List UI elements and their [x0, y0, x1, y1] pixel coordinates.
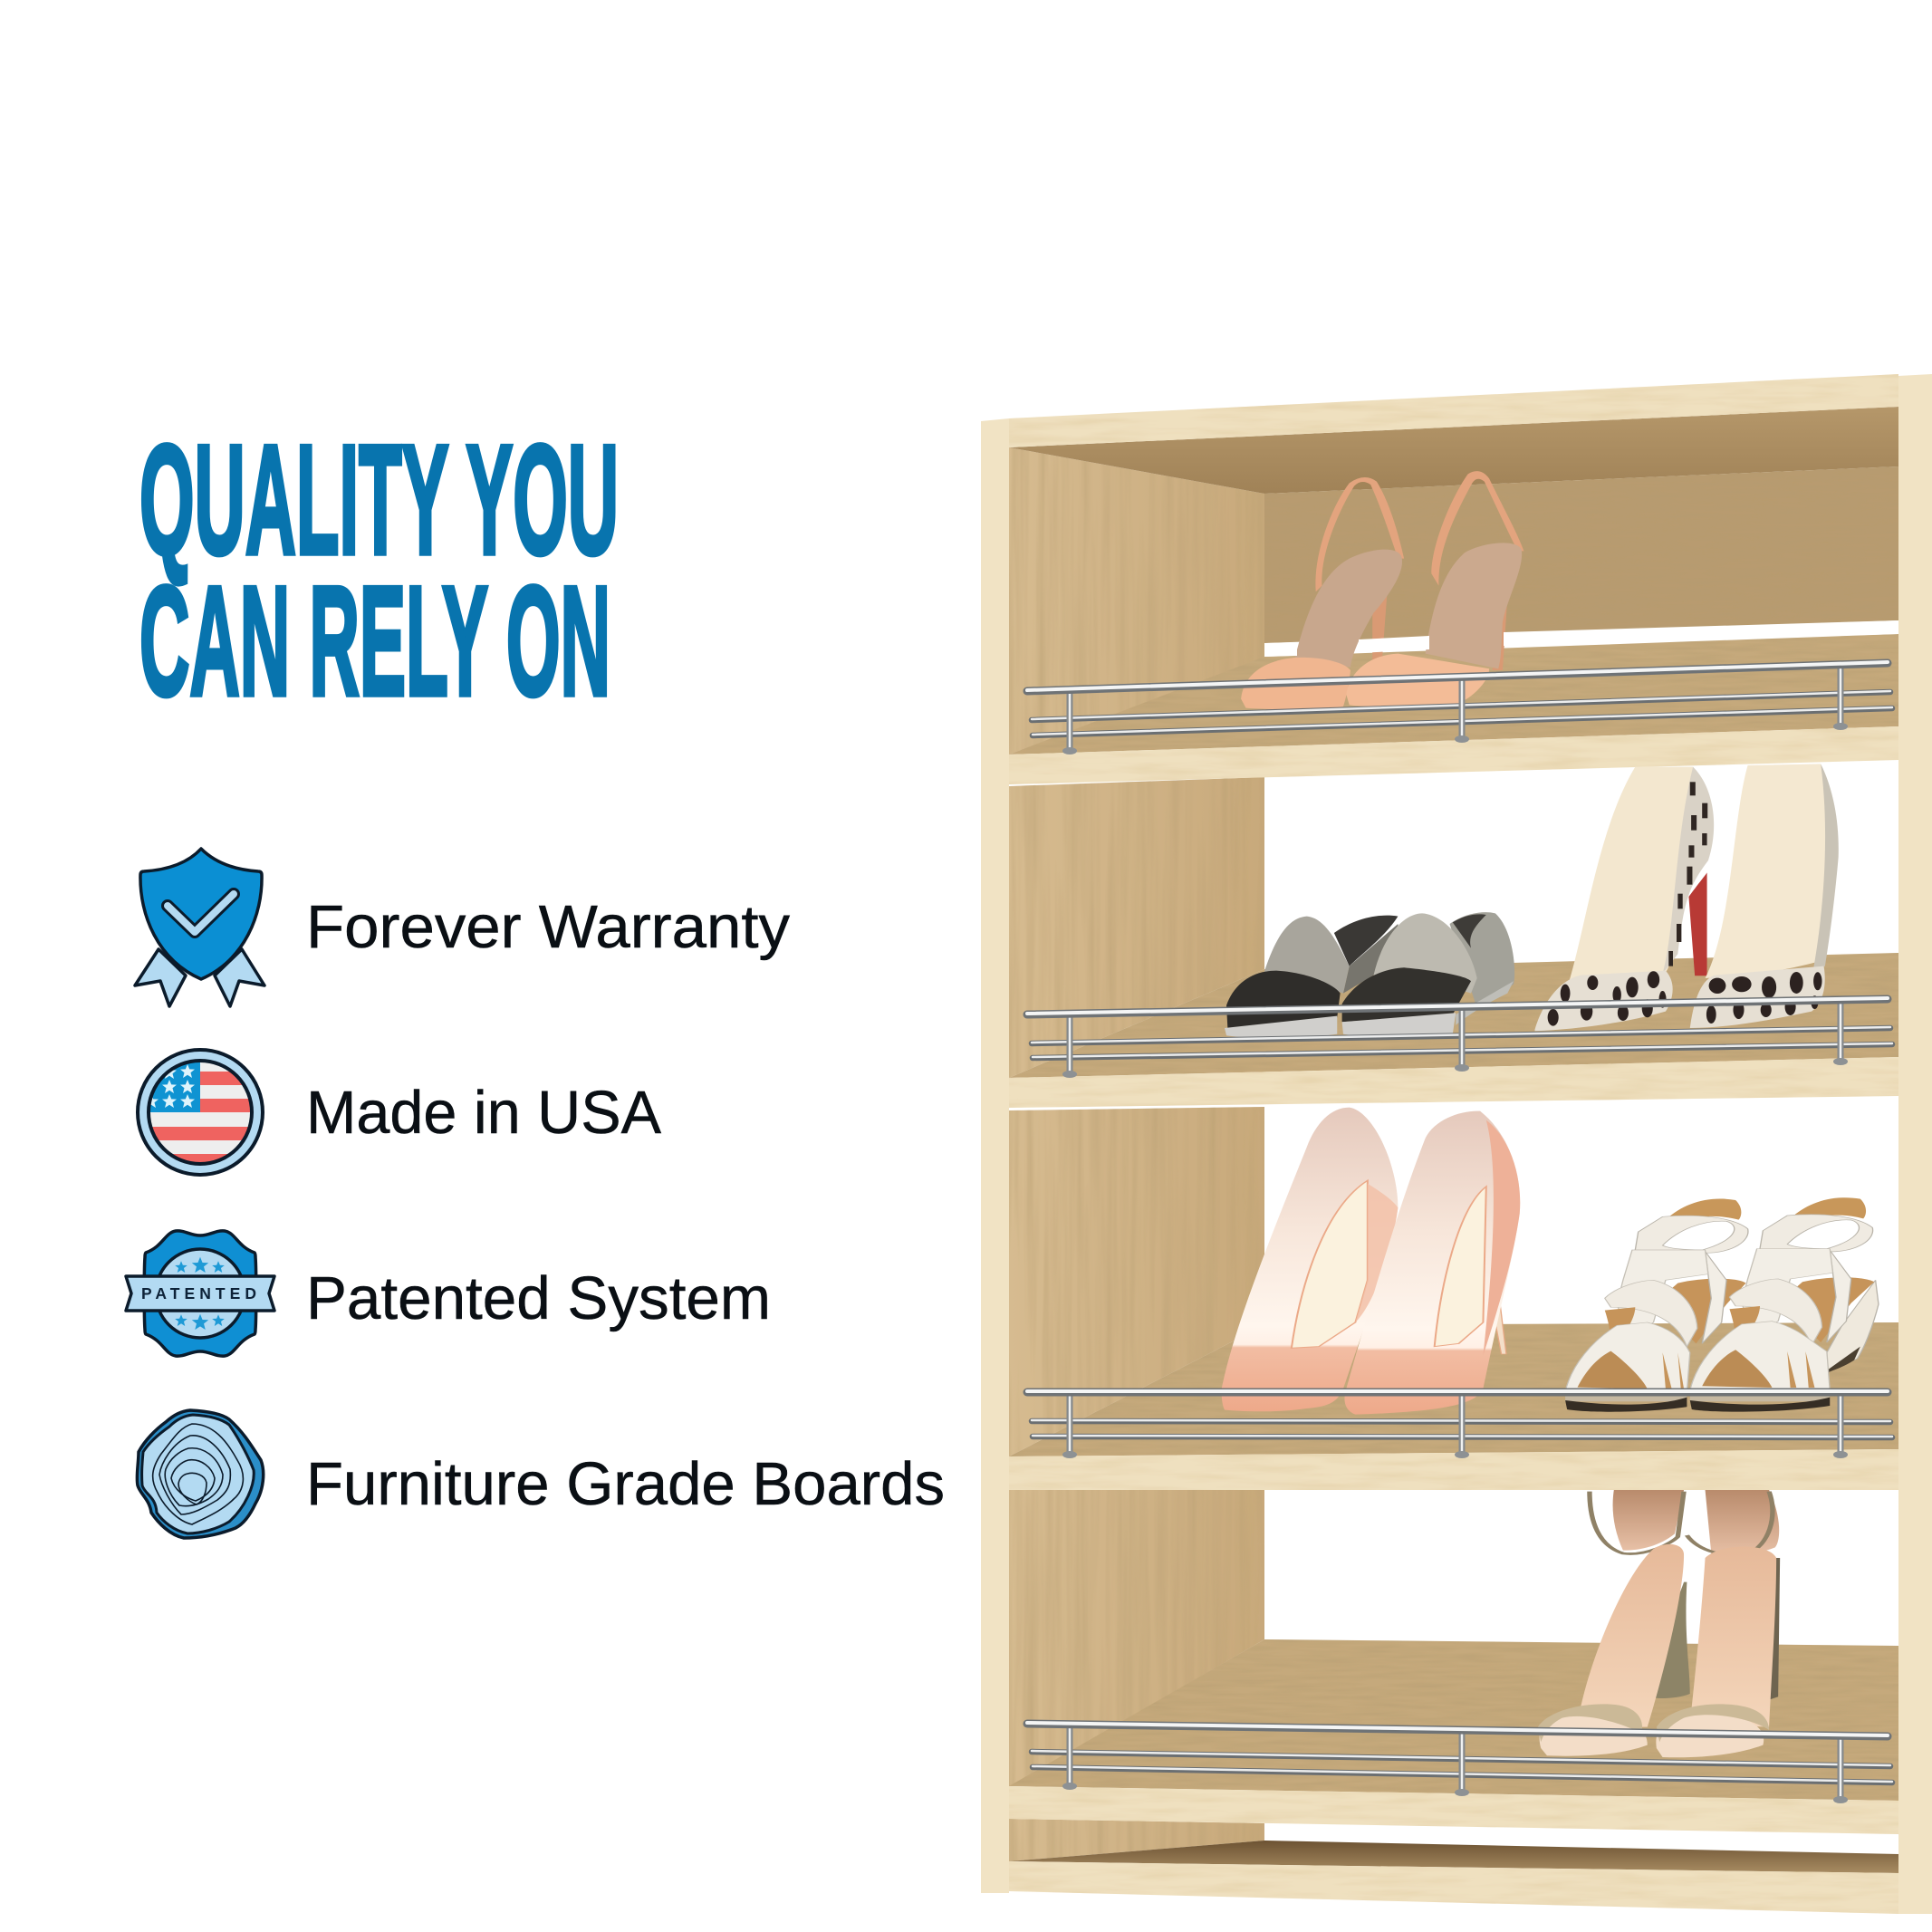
rack back panel — [1264, 466, 1898, 643]
white gap strip, top shelf — [1264, 642, 1297, 657]
icon: patented badge — [126, 1231, 274, 1356]
shoes: pink pumps — [1222, 1108, 1520, 1415]
rack top underside — [1009, 407, 1898, 494]
icon: usa flag — [138, 1050, 263, 1175]
shoes: peach slingbacks — [1241, 471, 1523, 709]
chrome rail: shelf 3 — [1027, 1391, 1892, 1458]
title — [139, 413, 619, 728]
left sandal — [1565, 1199, 1748, 1412]
chrome rail: shelf 4 — [1027, 1723, 1892, 1803]
shelf tops — [1009, 634, 1898, 1801]
feature list — [126, 849, 945, 1538]
rack side panels — [1009, 447, 1264, 1861]
icon: wood rings — [137, 1410, 264, 1538]
right sandal — [1690, 1197, 1874, 1412]
shoes: loafers and animal-print pumps — [1225, 764, 1839, 1038]
shoe rack — [981, 374, 1932, 1914]
plinth recess — [1009, 1841, 1898, 1873]
icon: patented badge: PATENTED — [141, 1284, 256, 1302]
shoes: white strappy sandals — [1565, 1197, 1879, 1412]
rack uprights — [981, 374, 1932, 1914]
label: patented system: Patented System — [306, 1264, 771, 1332]
label: furniture grade boards: Furniture Grade Boards — [306, 1450, 945, 1518]
shoes: nude block-heel sandals — [1538, 1490, 1780, 1757]
label: forever warranty: Forever Warranty — [306, 893, 791, 961]
label: made in usa: Made in USA — [306, 1079, 661, 1147]
icon: warranty shield — [135, 849, 264, 1006]
text: QUALITY YOU — [139, 413, 619, 587]
chrome rail: shelf 2 — [1027, 998, 1892, 1078]
shelf front edges — [1009, 374, 1898, 1914]
text: CAN RELY ON — [139, 554, 610, 728]
right sandal wedge — [1827, 1280, 1879, 1372]
chrome rail: shelf 1 — [1027, 662, 1892, 755]
